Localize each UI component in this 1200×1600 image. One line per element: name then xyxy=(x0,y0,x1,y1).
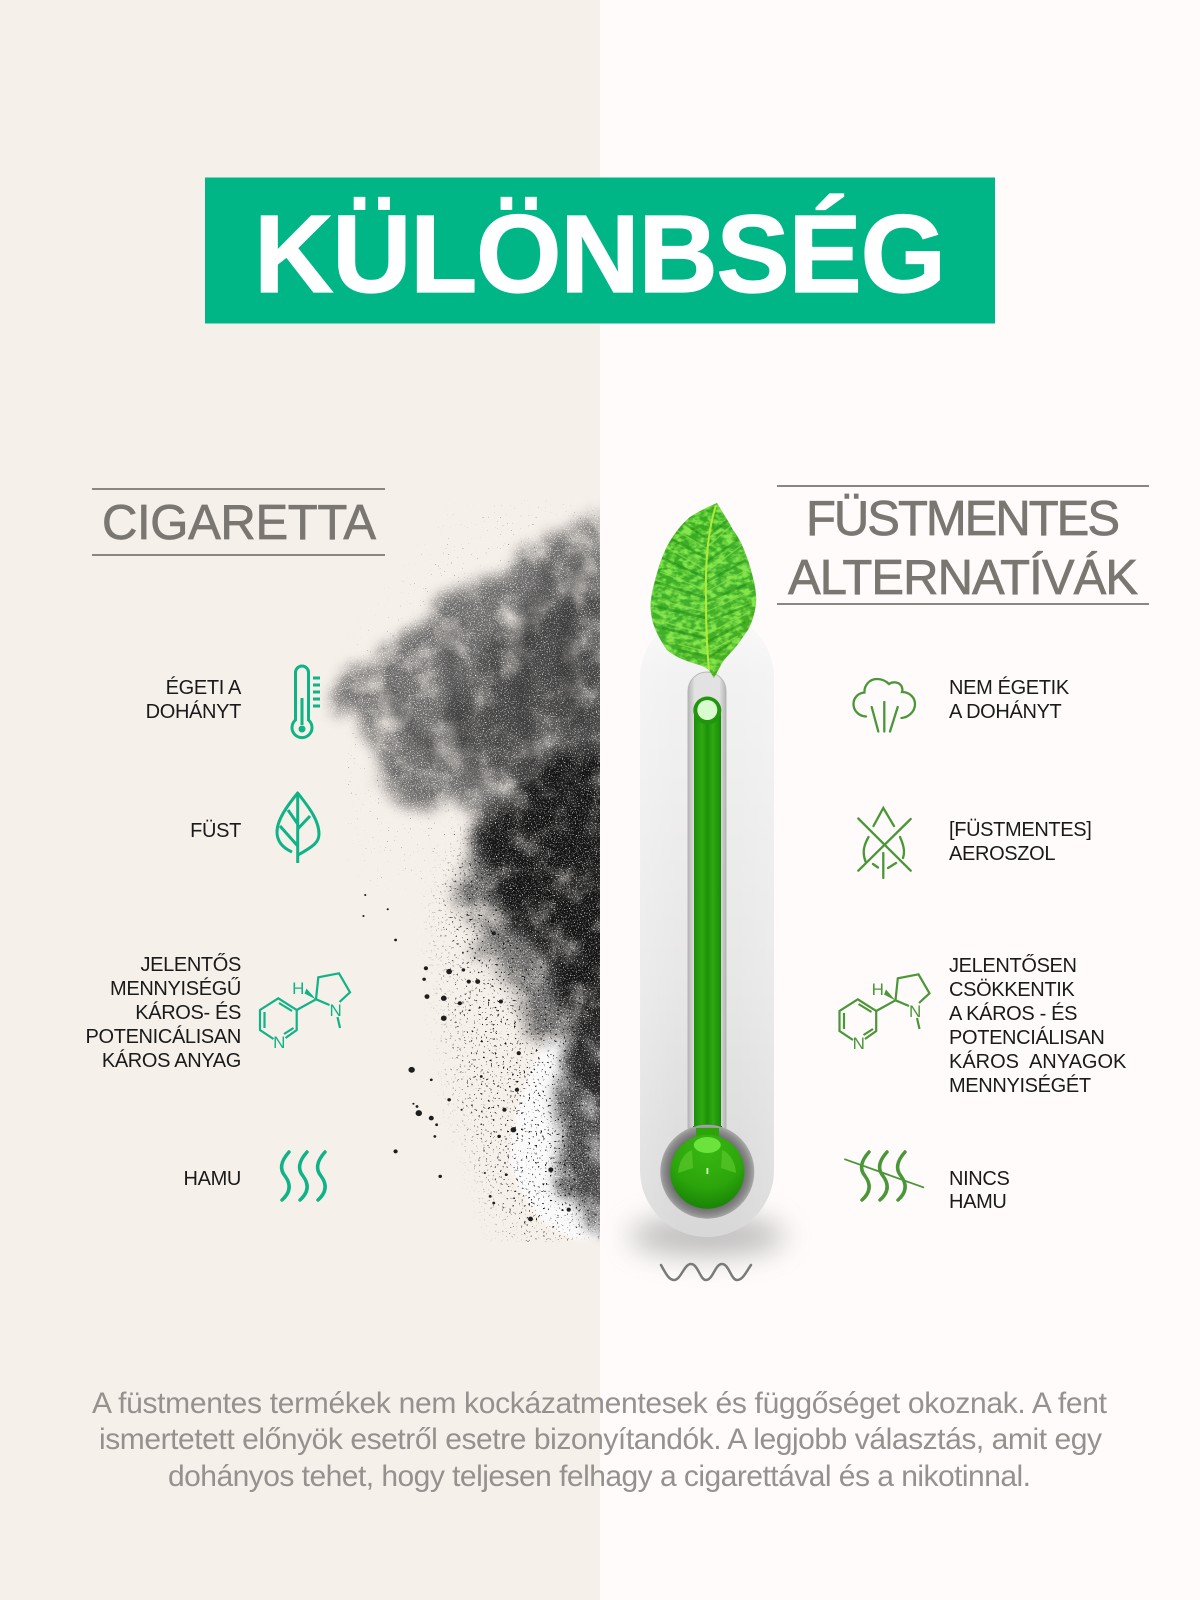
footer disclaimer xyxy=(92,1387,1108,1493)
smoke explosion image xyxy=(340,500,620,1242)
background: left panel xyxy=(0,0,600,1600)
tobacco leaf xyxy=(648,500,760,680)
heading: füstmentes alternatívák: ALTERNATÍVÁK xyxy=(788,551,1138,605)
text: jelentősen csökkentik: JELENTŐSEN xyxy=(949,954,1077,977)
text: jelentősen csökkentik: POTENCIÁLISAN xyxy=(949,1026,1104,1049)
icon: nicotine molecule: N xyxy=(909,1002,921,1021)
text: nincs hamu: NINCS xyxy=(949,1168,1009,1190)
text: hamu: HAMU xyxy=(184,1168,241,1190)
green column xyxy=(693,696,722,1128)
thermometer panel xyxy=(640,611,774,1237)
text: égeti a dohányt: DOHÁNYT xyxy=(146,700,241,723)
icon: thermometer xyxy=(292,666,320,738)
glass tube xyxy=(688,672,726,1128)
text: nincs hamu xyxy=(949,1168,1009,1213)
smoke wisps xyxy=(385,560,580,780)
icon: crossed heat waves xyxy=(845,1152,923,1200)
text: jelentősen csökkentik xyxy=(949,954,1127,1097)
thermometer bulb xyxy=(660,1125,754,1219)
icon: nicotine molecule: N xyxy=(273,1033,285,1052)
heading: cigaretta: CIGARETTA xyxy=(102,496,376,550)
icon: nicotine molecule: H xyxy=(872,980,884,999)
text: nem égetik: A DOHÁNYT xyxy=(949,700,1062,723)
text: jelentős mennyiségű: POTENICÁLISAN xyxy=(86,1025,241,1048)
text: füstmentes aeroszol: [FÜSTMENTES] xyxy=(949,819,1091,841)
heading: füstmentes alternatívák: FÜSTMENTES xyxy=(806,492,1120,546)
text: füstmentes aeroszol: AEROSZOL xyxy=(949,843,1055,865)
heading: füstmentes alternatívák xyxy=(777,485,1149,605)
panel shadow xyxy=(629,1216,785,1256)
icon: nicotine molecule xyxy=(840,974,930,1053)
text: nincs hamu: HAMU xyxy=(949,1191,1006,1213)
text: jelentős mennyiségű: KÁROS ANYAG xyxy=(102,1049,241,1072)
icon: nicotine molecule: N xyxy=(853,1034,865,1053)
text: égeti a dohányt: ÉGETI A xyxy=(166,676,242,699)
text: jelentős mennyiségű: MENNYISÉGŰ xyxy=(110,977,241,1000)
footer disclaimer: ismertetett előnyök esetről esetre bizonyítandók. A legjobb választás, amit egy xyxy=(99,1423,1102,1456)
icon: steam cloud xyxy=(854,679,915,732)
text: jelentősen csökkentik: A KÁROS - ÉS xyxy=(949,1002,1077,1025)
text: nem égetik: NEM ÉGETIK xyxy=(949,676,1070,699)
squiggle xyxy=(661,1264,751,1280)
text: füstmentes aeroszol xyxy=(949,819,1091,865)
icon: crossed leaf xyxy=(858,808,911,878)
text: jelentősen csökkentik: CSÖKKENTIK xyxy=(949,979,1075,1001)
icon: nicotine molecule: H xyxy=(292,979,304,998)
title banner: KÜLÖNBSÉG xyxy=(254,193,946,316)
text: jelentős mennyiségű: JELENTŐS xyxy=(140,953,241,976)
background: right panel xyxy=(600,0,1200,1600)
icon: leaf xyxy=(277,793,319,863)
icon: nicotine molecule: N xyxy=(330,1001,342,1020)
text: füst: FÜST xyxy=(190,820,241,842)
footer disclaimer: A füstmentes termékek nem kockázatmentesek és függőséget okoznak. A fent xyxy=(92,1387,1108,1420)
text: nem égetik xyxy=(949,676,1070,723)
footer disclaimer: dohányos tehet, hogy teljesen felhagy a cigarettával és a nikotinnal. xyxy=(168,1460,1031,1493)
thermometer illustration xyxy=(629,500,785,1280)
text: jelentős mennyiségű xyxy=(86,953,241,1072)
icon: nicotine molecule xyxy=(260,973,350,1052)
text: jelentős mennyiségű: KÁROS- ÉS xyxy=(135,1001,241,1024)
text: jelentősen csökkentik: MENNYISÉGÉT xyxy=(949,1074,1091,1097)
icon: heat waves xyxy=(282,1152,325,1200)
text: jelentősen csökkentik: KÁROS ANYAGOK xyxy=(949,1050,1127,1073)
text: égeti a dohányt xyxy=(146,676,242,723)
